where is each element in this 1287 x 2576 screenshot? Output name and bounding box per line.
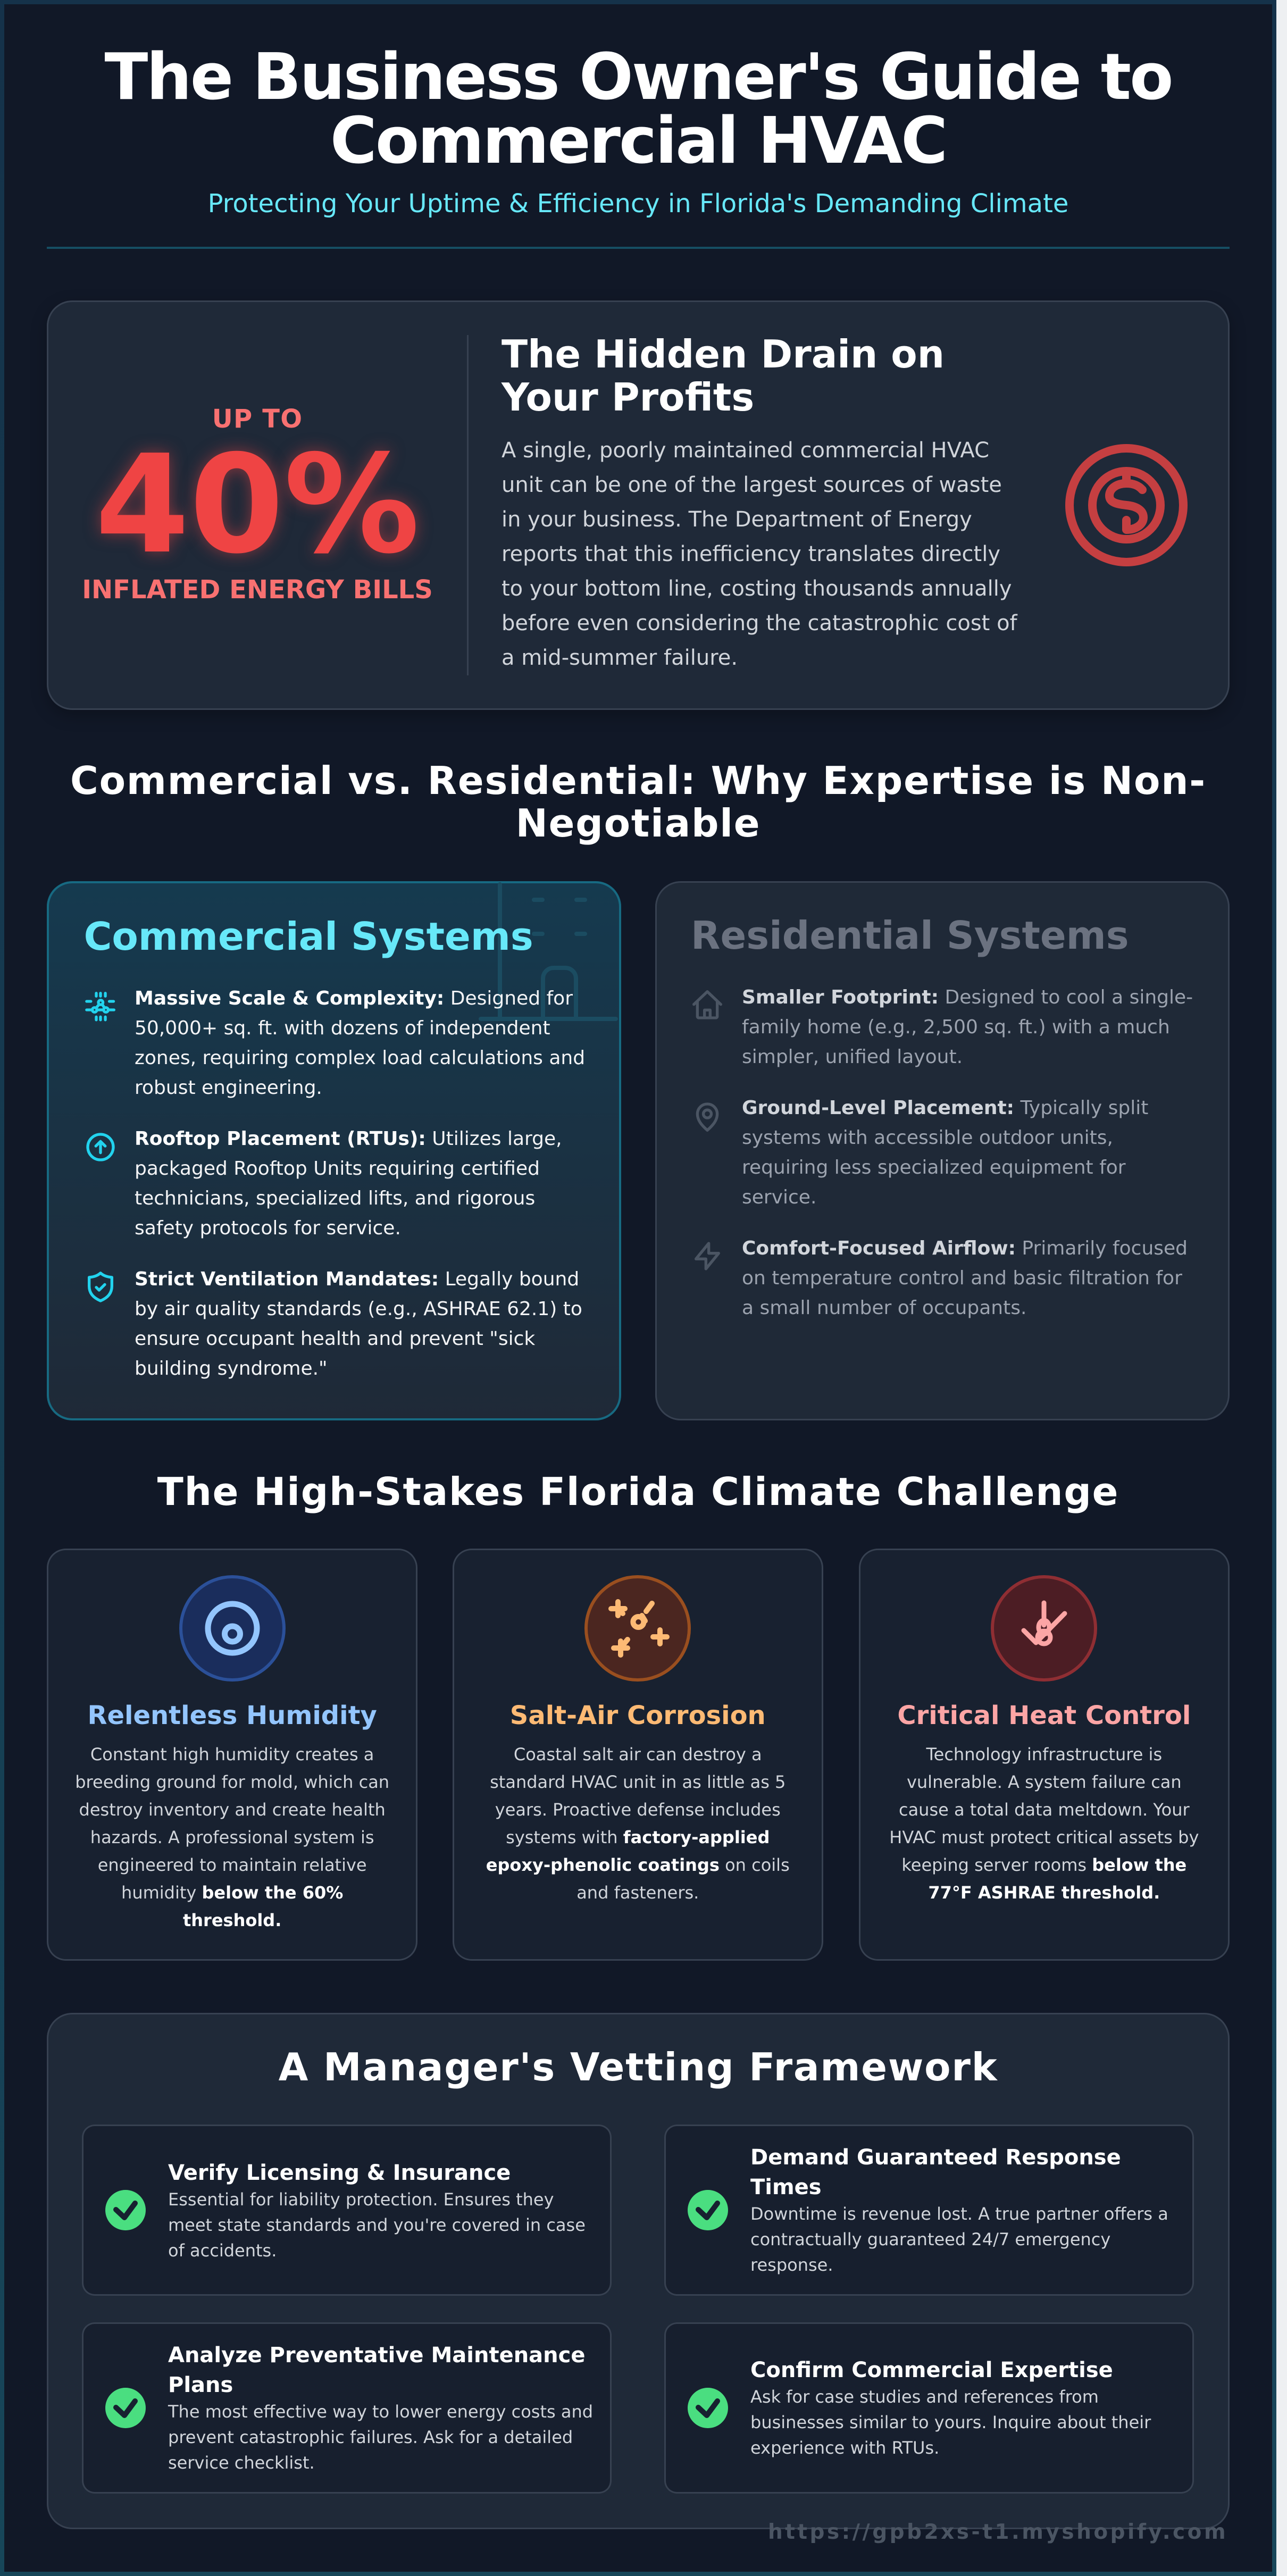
item text bbox=[750, 2354, 1151, 2461]
text: massive scale bbox=[135, 987, 585, 1099]
icon: building watermark bbox=[479, 882, 618, 1021]
icon: corrosion bbox=[584, 1575, 691, 1682]
header bbox=[47, 40, 1230, 249]
panel: vetting framework bbox=[47, 2013, 1230, 2529]
stat lead-in: UP TO bbox=[212, 404, 303, 434]
card: critical heat control bbox=[859, 1549, 1230, 1961]
item text: Analyze Preventative Maintenance bbox=[168, 2343, 585, 2368]
icon: check bbox=[105, 2388, 146, 2428]
text: hidden drain body: A single, poorly maintained commercial HVAC bbox=[502, 438, 989, 463]
card text: destroy inventory and create health bbox=[79, 1800, 386, 1820]
title bbox=[104, 40, 1172, 178]
heading: florida climate: The High-Stakes Florida Climate Challenge bbox=[157, 1469, 1119, 1514]
card text bbox=[47, 1741, 417, 1934]
text: hidden drain body: unit can be one of the largest sources of waste bbox=[502, 473, 1002, 497]
item text: response. bbox=[750, 2255, 833, 2275]
item: commercial expertise bbox=[664, 2322, 1194, 2494]
text: ground-level placement: requiring less specialized equipment for bbox=[742, 1157, 1126, 1178]
item text: Verify Licensing & Insurance bbox=[168, 2161, 511, 2185]
item text bbox=[168, 2339, 593, 2475]
heading: commercial vs residential bbox=[70, 758, 1206, 846]
item text: service checklist. bbox=[168, 2453, 315, 2473]
card text: Technology infrastructure is bbox=[926, 1744, 1162, 1764]
icon: check bbox=[688, 2388, 728, 2428]
item text: Ask for case studies and references from bbox=[750, 2387, 1099, 2407]
title: Commercial HVAC bbox=[330, 104, 946, 178]
title: The Business Owner's Guide to bbox=[104, 40, 1172, 114]
panel: residential systems bbox=[655, 881, 1230, 1420]
text: ventilation mandates: by air quality standards (e.g., ASHRAE 62.1) to bbox=[135, 1298, 582, 1320]
item text: Downtime is revenue lost. A true partner offers a bbox=[750, 2204, 1168, 2224]
item text: The most effective way to lower energy costs and bbox=[168, 2402, 593, 2422]
card text: epoxy-phenolic coatings on coils bbox=[486, 1855, 790, 1875]
panel: commercial systems bbox=[47, 881, 621, 1420]
card text: humidity below the 60% bbox=[121, 1883, 343, 1903]
text: hidden drain body: to your bottom line, costing thousands annually bbox=[502, 576, 1012, 601]
heading: residential: Residential Systems bbox=[691, 913, 1129, 958]
item text: prevent catastrophic failures. Ask for a detailed bbox=[168, 2427, 573, 2447]
heading: vetting framework: A Manager's Vetting Framework bbox=[279, 2045, 998, 2089]
icon: shield check bbox=[88, 1272, 113, 1302]
text: rooftop placement: packaged Rooftop Units requiring certified bbox=[135, 1157, 540, 1180]
text: rooftop placement: safety protocols for service. bbox=[135, 1217, 401, 1239]
stat: 40 percent bbox=[82, 404, 433, 605]
text: comfort airflow: a small number of occupants. bbox=[742, 1297, 1026, 1319]
item text: contractually guaranteed 24/7 emergency bbox=[750, 2229, 1110, 2249]
icon: house bbox=[692, 990, 722, 1019]
card text: standard HVAC unit in as little as 5 bbox=[490, 1772, 785, 1792]
text: smaller footprint: Smaller Footprint: Designed to cool a single- bbox=[742, 986, 1193, 1008]
card text: keeping server rooms below the bbox=[901, 1855, 1186, 1875]
text: massive scale: zones, requiring complex load calculations and bbox=[135, 1047, 585, 1069]
card text: vulnerable. A system failure can bbox=[907, 1772, 1182, 1792]
card: relentless humidity bbox=[47, 1549, 417, 1961]
item: response times bbox=[664, 2125, 1194, 2296]
text: massive scale: Massive Scale & Complexity: Designed for bbox=[135, 987, 573, 1009]
text: ground-level placement bbox=[742, 1093, 1148, 1212]
item text: Times bbox=[750, 2175, 822, 2199]
card title: Salt-Air Corrosion bbox=[510, 1701, 766, 1730]
stat caption: INFLATED ENERGY BILLS bbox=[82, 575, 433, 605]
card text: Constant high humidity creates a bbox=[90, 1744, 374, 1764]
card text: years. Proactive defense includes bbox=[495, 1800, 781, 1820]
text: ventilation mandates: building syndrome." bbox=[135, 1357, 328, 1379]
stat number: 40% bbox=[95, 426, 420, 584]
item text: meet state standards and you're covered in case bbox=[168, 2215, 586, 2235]
item: maintenance plans bbox=[82, 2322, 612, 2494]
text: comfort airflow: on temperature control and basic filtration for bbox=[742, 1267, 1182, 1289]
text: rooftop placement: Rooftop Placement (RTUs): Utilizes large, bbox=[135, 1127, 562, 1150]
text: comfort airflow bbox=[742, 1234, 1188, 1323]
item text bbox=[168, 2157, 586, 2263]
item text: of accidents. bbox=[168, 2240, 277, 2261]
text: massive scale: 50,000+ sq. ft. with dozens of independent bbox=[135, 1017, 550, 1039]
heading: commercial: Commercial Systems bbox=[84, 914, 533, 959]
header divider bbox=[47, 247, 1230, 249]
text: ventilation mandates: ensure occupant health and prevent "sick bbox=[135, 1327, 535, 1350]
card text: HVAC must protect critical assets by bbox=[889, 1827, 1199, 1847]
card text bbox=[453, 1741, 823, 1906]
icon: check bbox=[105, 2190, 146, 2230]
item text: Demand Guaranteed Response bbox=[750, 2145, 1121, 2170]
text: smaller footprint: family home (e.g., 2,500 sq. ft.) with a much bbox=[742, 1016, 1170, 1038]
text: smaller footprint bbox=[742, 986, 1193, 1068]
card text bbox=[859, 1741, 1230, 1906]
icon: location pin bbox=[690, 1100, 724, 1134]
icon: heat bbox=[991, 1575, 1097, 1682]
text: rooftop placement bbox=[135, 1127, 562, 1239]
icon: dollar coin bbox=[1065, 444, 1188, 566]
card text: cause a total data meltdown. Your bbox=[899, 1800, 1190, 1820]
card text: systems with factory-applied bbox=[506, 1827, 770, 1847]
card text: engineered to maintain relative bbox=[98, 1855, 367, 1875]
item text: Plans bbox=[168, 2373, 233, 2397]
item: licensing bbox=[82, 2125, 612, 2296]
text: hidden drain body: reports that this inefficiency translates directly bbox=[502, 542, 1000, 566]
subtitle: Protecting Your Uptime & Efficiency in Florida's Demanding Climate bbox=[208, 189, 1068, 219]
icon: arrow up circle bbox=[86, 1133, 115, 1161]
icon: check bbox=[688, 2190, 728, 2230]
text: ground-level placement: Ground-Level Placement: Typically split bbox=[742, 1097, 1148, 1119]
item text: Essential for liability protection. Ensures they bbox=[168, 2189, 554, 2210]
card: salt-air corrosion bbox=[453, 1549, 823, 1961]
heading: commercial vs residential: Commercial vs. Residential: Why Expertise is Non- bbox=[70, 758, 1206, 803]
card text: threshold. bbox=[183, 1910, 281, 1930]
text: hidden drain body: in your business. The Department of Energy bbox=[502, 507, 972, 532]
item text: experience with RTUs. bbox=[750, 2438, 939, 2458]
text: ventilation mandates: Strict Ventilation Mandates: Legally bound bbox=[135, 1268, 579, 1290]
heading: hidden drain: Your Profits bbox=[502, 375, 754, 420]
panel: hidden drain bbox=[47, 300, 1230, 710]
card title: Relentless Humidity bbox=[87, 1701, 377, 1730]
card text: and fasteners. bbox=[576, 1883, 699, 1903]
item text bbox=[750, 2142, 1168, 2278]
card text: 77°F ASHRAE threshold. bbox=[928, 1883, 1160, 1903]
icon: humidity bbox=[179, 1575, 286, 1682]
item text: businesses similar to yours. Inquire about their bbox=[750, 2412, 1151, 2432]
item text: Confirm Commercial Expertise bbox=[750, 2358, 1113, 2382]
heading: hidden drain: The Hidden Drain on bbox=[502, 332, 945, 377]
card text: hazards. A professional system is bbox=[90, 1827, 374, 1847]
heading: hidden drain bbox=[501, 332, 945, 420]
icon: lightning bolt bbox=[690, 1239, 724, 1273]
text: ground-level placement: service. bbox=[742, 1186, 816, 1208]
footer url watermark: https://gpb2xs-t1.myshopify.com bbox=[768, 2520, 1228, 2544]
text: hidden drain body: before even considering the catastrophic cost of bbox=[502, 611, 1017, 635]
card text: Coastal salt air can destroy a bbox=[514, 1744, 762, 1764]
text: hidden drain body bbox=[502, 438, 1018, 670]
text: ground-level placement: systems with accessible outdoor units, bbox=[742, 1127, 1113, 1149]
card text: breeding ground for mold, which can bbox=[75, 1772, 389, 1792]
heading: commercial vs residential: Negotiable bbox=[516, 801, 760, 846]
text: massive scale: robust engineering. bbox=[135, 1076, 322, 1099]
text: comfort airflow: Comfort-Focused Airflow: Primarily focused bbox=[742, 1237, 1188, 1259]
text: ventilation mandates bbox=[135, 1268, 582, 1379]
text: hidden drain body: a mid-summer failure. bbox=[502, 646, 738, 670]
text: smaller footprint: simpler, unified layout. bbox=[742, 1046, 963, 1068]
card title: Critical Heat Control bbox=[897, 1701, 1191, 1730]
icon: network chip bbox=[85, 992, 115, 1021]
text: rooftop placement: technicians, specialized lifts, and rigorous bbox=[135, 1187, 535, 1209]
